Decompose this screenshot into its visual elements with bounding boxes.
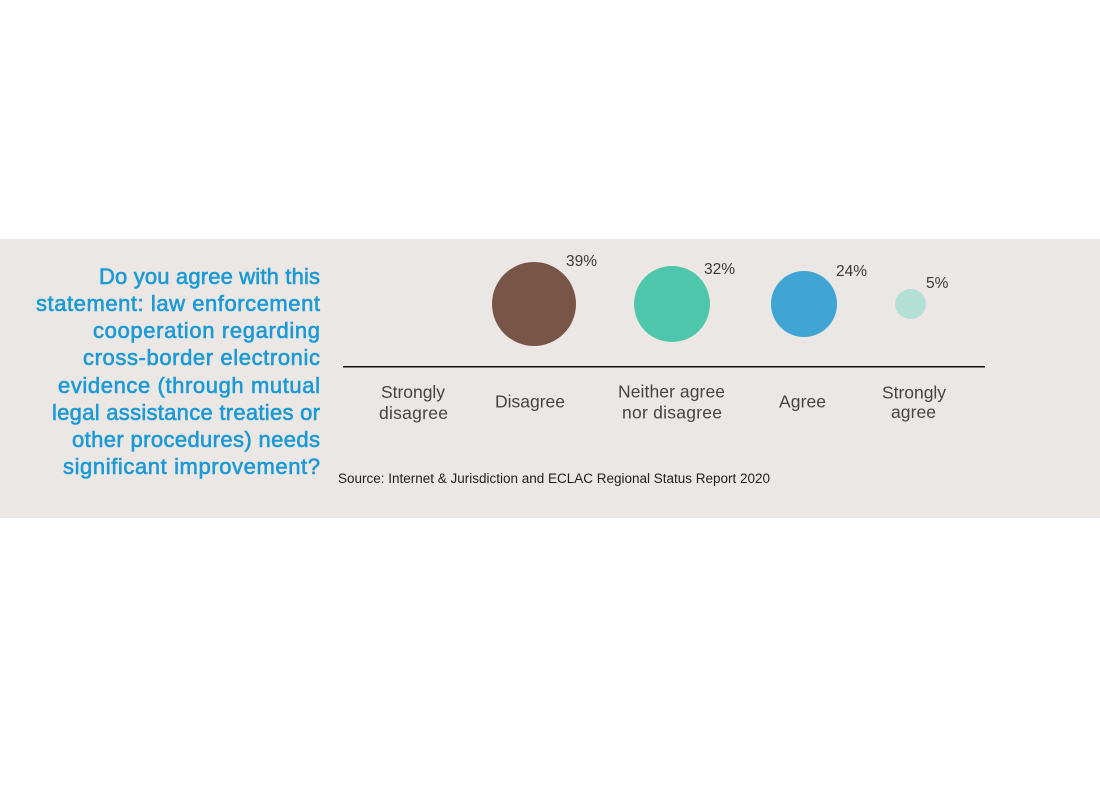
source note: Source: Internet & Jurisdiction and ECLAC Regional Status Report 2020: [338, 471, 770, 486]
label: strongly disagree: [379, 382, 448, 423]
question heading: [36, 264, 320, 479]
bubble: neither agree nor disagree: [634, 266, 710, 342]
bubble: disagree: [492, 262, 576, 346]
label: neither agree nor disagree: nor disagree: [622, 402, 722, 422]
label: agree: Agree: [779, 392, 826, 412]
label: neither agree nor disagree: [618, 382, 725, 422]
value: 5%: 5%: [926, 275, 949, 292]
question heading: other procedures) needs: [72, 427, 320, 452]
bubble: agree: [771, 271, 837, 337]
value: 32%: 32%: [704, 261, 735, 278]
panel: background band: [0, 239, 1100, 518]
question heading: Do you agree with this: [99, 264, 320, 289]
label: strongly agree: Strongly: [882, 382, 946, 402]
label: strongly agree: agree: [891, 402, 936, 422]
bubble: strongly agree: [895, 289, 926, 319]
value: 24%: 24%: [836, 263, 867, 280]
label: strongly disagree: Strongly: [381, 382, 445, 402]
label: neither agree nor disagree: Neither agree: [618, 382, 725, 402]
question heading: significant improvement?: [63, 454, 320, 479]
value: 39%: 39%: [566, 253, 597, 270]
question heading: evidence (through mutual: [58, 373, 320, 398]
question heading: cooperation regarding: [93, 318, 320, 343]
question heading: cross-border electronic: [83, 345, 320, 370]
question heading: legal assistance treaties or: [52, 400, 320, 425]
label: strongly disagree: disagree: [379, 403, 448, 423]
question heading: statement: law enforcement: [36, 291, 320, 316]
label: strongly agree: [882, 382, 946, 422]
axis line: [343, 366, 985, 368]
label: disagree: Disagree: [495, 392, 565, 412]
